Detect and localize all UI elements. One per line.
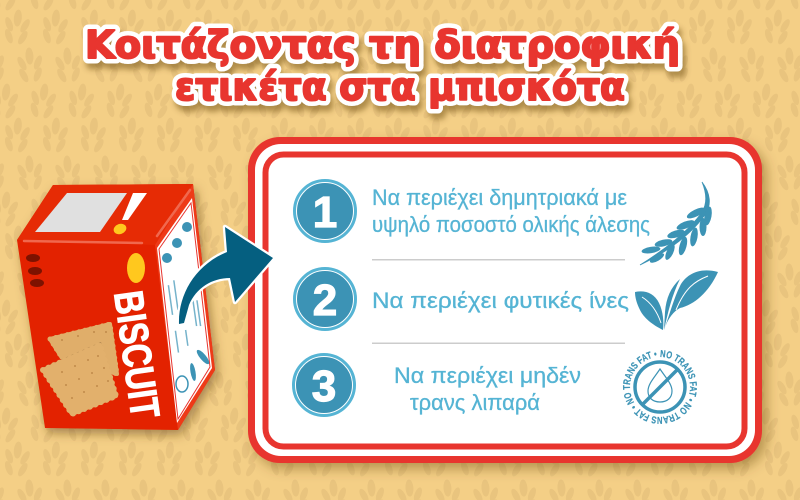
step 1 text: υψηλό ποσοστό ολικής άλεσης xyxy=(372,212,650,237)
icon: biscuit box xyxy=(17,184,215,430)
step 2 number badge xyxy=(294,268,356,330)
icon: leaf check xyxy=(635,270,718,330)
step 2 number badge: 2 xyxy=(313,276,337,325)
panel: recommendations card xyxy=(248,137,762,463)
step 1 text: Να περιέχει δημητριακά με xyxy=(372,185,627,210)
title: ετικέτα στα μπισκότα xyxy=(175,65,625,109)
divider xyxy=(372,342,625,344)
box front decoration xyxy=(26,253,145,287)
step 2 text: Να περιέχει φυτικές ίνες xyxy=(372,288,629,313)
step 3 number badge xyxy=(294,354,354,416)
title: Κοιτάζοντας τη διατροφική xyxy=(85,23,680,67)
arrow xyxy=(179,227,273,324)
step 3 text xyxy=(394,363,581,415)
step 3 text: Να περιέχει μηδέν xyxy=(394,363,581,388)
box top details xyxy=(24,190,190,243)
step 3 text: τρανς λιπαρά xyxy=(410,390,540,415)
title: Κοιτάζοντας τη διατροφική xyxy=(85,23,680,67)
box brand name: BISCUIT xyxy=(105,288,168,421)
step 1 number badge xyxy=(294,180,356,242)
biscuits xyxy=(43,324,117,414)
icon: wheat xyxy=(640,182,713,265)
step 3 number badge: 3 xyxy=(312,362,336,411)
divider xyxy=(372,259,625,260)
step 1 number badge: 1 xyxy=(313,188,337,237)
icon: no trans fat badge: NO TRANS FAT • NO TRANS FAT • NO TRANS FAT • xyxy=(622,350,697,424)
step 1 text xyxy=(372,185,650,237)
title xyxy=(85,23,680,109)
title: ετικέτα στα μπισκότα xyxy=(175,65,625,109)
box side label miniature xyxy=(162,222,211,392)
